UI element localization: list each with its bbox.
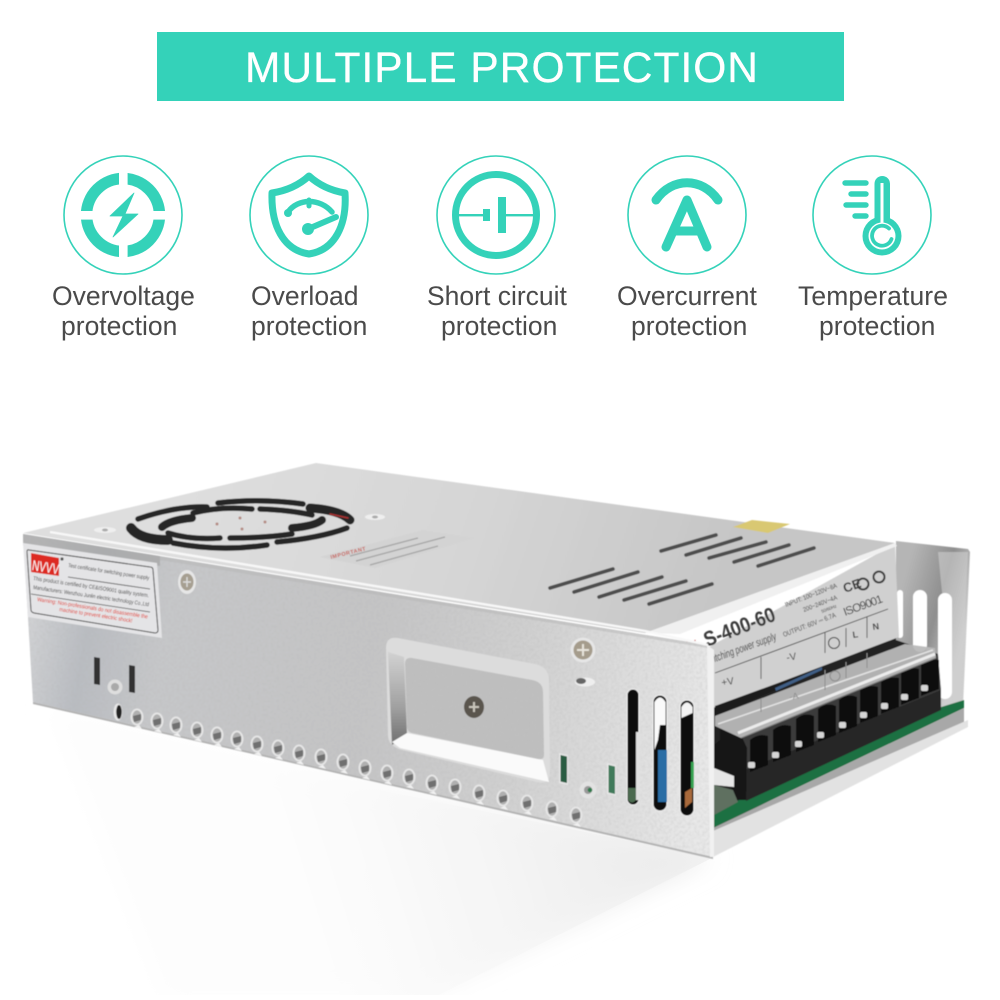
end label plate: itching power supply <box>712 631 779 665</box>
front face <box>23 534 714 859</box>
clear terminal cover: -A <box>789 691 799 702</box>
end label plate: L <box>852 629 859 640</box>
NVVV logo: NVVV <box>31 558 60 578</box>
label: temperature: Temperature <box>798 281 948 311</box>
terminal block <box>714 654 941 815</box>
cooling fan grille <box>131 501 350 548</box>
top face <box>23 463 897 634</box>
end label plate: N <box>872 621 880 632</box>
label: short circuit: Short circuit <box>427 281 568 311</box>
end label plate: 50/60Hz <box>821 603 838 614</box>
end label plate: ISO9001 <box>842 594 885 619</box>
end label plate: S-400-60 <box>701 603 779 652</box>
row of vent holes <box>130 708 582 827</box>
top vents <box>550 535 814 604</box>
yellow sticker <box>733 520 790 533</box>
icon: capacitor symbol in ring <box>456 174 536 256</box>
bottom flange <box>713 708 968 857</box>
certificate label: Manufacturers: Wenzhou Junlin electric technology Co.,Ltd <box>33 585 149 608</box>
label: short circuit: protection <box>441 311 557 341</box>
side bracket with slots <box>896 541 970 712</box>
label: overcurrent: protection <box>631 311 747 341</box>
label: overvoltage: protection <box>61 311 177 341</box>
small side openings <box>94 657 616 798</box>
label: overload: Overload <box>251 281 359 311</box>
icon: shield with gauge <box>272 176 345 254</box>
icon: segmented ring with lightning bolt <box>73 165 173 265</box>
embossed recess <box>386 638 550 783</box>
icon: thermometer <box>845 176 902 256</box>
end ventilation slots <box>627 689 694 816</box>
circuit board <box>713 700 964 828</box>
label: temperature: protection <box>819 311 935 341</box>
end label plate <box>681 544 899 716</box>
end label plate: -V <box>786 651 798 664</box>
title banner: MULTIPLE PROTECTION <box>245 45 758 92</box>
certificate label: machine to prevent electric shock! <box>59 607 133 625</box>
certificate label: This product is certified by CE&ISO9001 quality system. <box>33 576 150 599</box>
end label plate: INPUT: 100~120V~8A <box>784 582 839 609</box>
protection item: overvoltage <box>52 156 195 341</box>
end label plate: +V <box>721 676 735 689</box>
product: switching power supply <box>23 463 970 859</box>
end label plate: 200~240V~4A <box>802 594 839 614</box>
protection item: overcurrent <box>617 156 758 341</box>
end label plate: CE <box>841 575 863 596</box>
title banner <box>157 32 844 101</box>
icon: letter A under arc <box>656 183 718 247</box>
certificate label: Warning: Non-professionals do not disassemble the <box>37 597 148 620</box>
label: overload: protection <box>251 311 367 341</box>
notice sticker: IMPORTANT <box>330 546 367 561</box>
case screws <box>178 570 596 718</box>
certificate label <box>23 543 162 638</box>
label: overcurrent: Overcurrent <box>617 281 758 311</box>
end label plate: OUTPUT: 60V ⎓ 6.7A <box>782 612 837 639</box>
protection item: overload <box>250 156 368 341</box>
top screws <box>94 514 385 533</box>
front top highlight edge <box>50 532 708 645</box>
inner cavity <box>709 620 942 830</box>
protection item: short circuit <box>427 156 568 341</box>
floor shadow <box>0 705 1000 1000</box>
notice sticker <box>320 530 475 568</box>
certificate label: Test certificate for switching power supply <box>68 563 150 582</box>
clear terminal cover <box>715 644 936 738</box>
label: overvoltage: Overvoltage <box>52 281 195 311</box>
protection item: temperature <box>798 156 948 341</box>
